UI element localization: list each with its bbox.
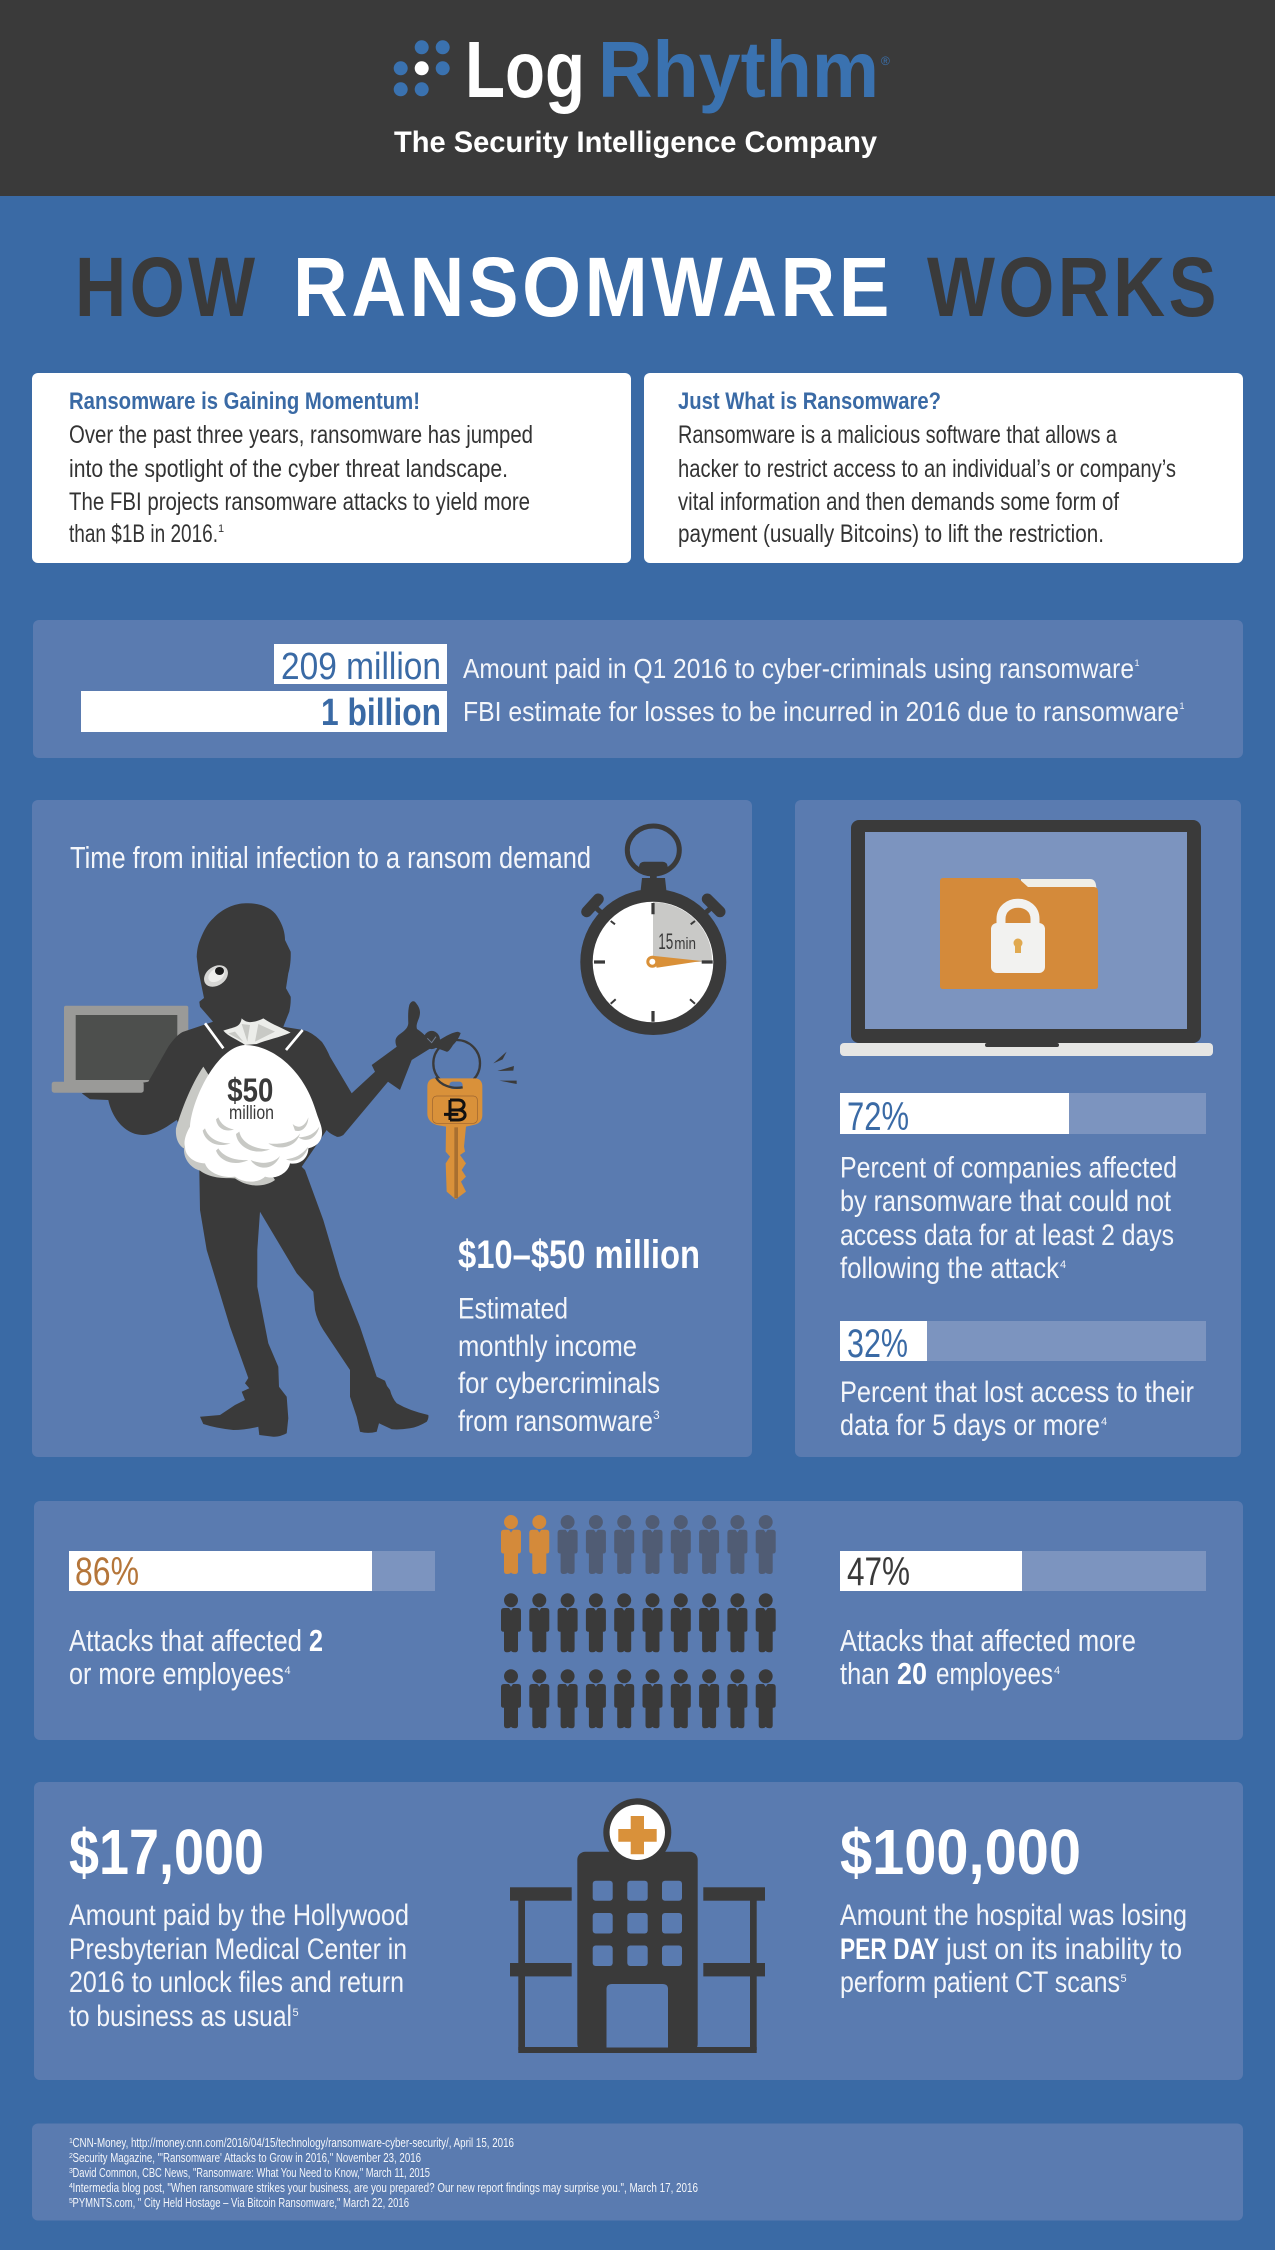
bag label: $50 <box>227 1072 273 1109</box>
stat: $100,000: $100,000 <box>840 1816 1081 1888</box>
text: 32% caption <box>840 1376 1194 1442</box>
illustration: masked thief with laptop and money bag <box>52 903 461 1437</box>
bar: 47% <box>840 1550 1206 1594</box>
text: 72% caption: Percent of companies affected <box>840 1152 1177 1184</box>
title: WORKS <box>927 240 1220 334</box>
header band with logo <box>0 0 1275 196</box>
logo dots <box>394 40 450 96</box>
footnote 1: 1 <box>69 2138 73 2145</box>
footnote 4: 4 <box>69 2183 73 2190</box>
caption: FBI estimate: FBI estimate for losses to be incurred in 2016 due to ransomware <box>463 696 1179 727</box>
text: 72% caption <box>840 1152 1177 1285</box>
laptop base <box>52 1082 144 1093</box>
text: hospital losses: Amount the hospital was losing <box>840 1899 1187 1932</box>
text: 47% caption: than <box>840 1656 890 1691</box>
bar: 72% <box>840 1093 1206 1139</box>
bag label: million <box>229 1103 274 1124</box>
bar: 32% <box>840 1321 1206 1366</box>
footnote 1: CNN-Money, http://money.cnn.com/2016/04/15/technology/ransomware-cyber-security/, April 15, 2016 <box>72 2136 514 2150</box>
thief silhouette <box>82 903 461 1437</box>
row 1 <box>501 1515 776 1574</box>
logo wordmark: Log <box>465 25 585 114</box>
footnote 3: 3 <box>69 2168 73 2175</box>
body text: The FBI projects ransomware attacks to yield more <box>69 488 530 516</box>
text: 72% caption: 4 <box>1060 1259 1066 1271</box>
panel: ransom amounts <box>33 620 1243 758</box>
money bag <box>176 1018 322 1185</box>
icon: hospital building <box>510 1798 765 2053</box>
text: 47% caption <box>840 1623 1136 1691</box>
text: 86% caption: Attacks that affected <box>69 1623 302 1658</box>
bar: 209 million: 209 million <box>281 646 441 688</box>
logo wordmark: Rhythm <box>598 25 879 114</box>
panel: what is ransomware <box>644 373 1243 563</box>
text: 47% caption: Attacks that affected more <box>840 1623 1136 1658</box>
text: Hollywood Presbyterian: to business as usual <box>69 2000 292 2033</box>
bar: 86% <box>69 1550 435 1594</box>
row 2 <box>501 1593 776 1652</box>
stat: monthly income: $10–$50 million <box>458 1233 700 1277</box>
stat: $17,000: $17,000 <box>69 1816 264 1888</box>
body text <box>69 421 533 548</box>
text: 47% caption: employees <box>936 1656 1053 1691</box>
text: hospital losses: just on its inability to <box>945 1933 1182 1966</box>
footnote 4: Intermedia blog post, "When ransomware strikes your business, are you prepared? Our new report findings may surprise you.", March 17, 2016 <box>72 2181 698 2195</box>
bar: 1 billion: 1 billion <box>321 692 441 734</box>
bar: 47%: 47% <box>847 1550 910 1594</box>
icon: laptop with locked folder <box>840 820 1213 1056</box>
text: 86% caption: or more employees <box>69 1656 284 1691</box>
text: 32% caption: data for 5 days or more <box>840 1409 1100 1442</box>
heading: Ransomware is Gaining Momentum! <box>69 388 420 415</box>
panel: hospital costs <box>34 1782 1243 2080</box>
footnote 3: David Common, CBC News, "Ransomware: What You Need to Know," March 11, 2015 <box>72 2166 430 2180</box>
body text: Over the past three years, ransomware has jumped <box>69 421 533 449</box>
logo wordmark <box>465 25 890 114</box>
text: 32% caption: 4 <box>1101 1416 1107 1428</box>
text: 47% caption: 4 <box>1054 1665 1060 1677</box>
text: 86% caption: 4 <box>284 1665 291 1677</box>
footnote 2: Security Magazine, "'Ransomware' Attacks to Grow in 2016," November 23, 2016 <box>72 2151 421 2165</box>
panel: time and income <box>32 800 752 1457</box>
stat: monthly income <box>458 1233 700 1438</box>
stat: monthly income: Estimated <box>458 1292 568 1326</box>
title: HOW <box>75 240 258 334</box>
caption: FBI estimate: 1 <box>1180 701 1185 711</box>
icon: bitcoin key <box>423 1031 517 1199</box>
text: 86% caption <box>69 1623 323 1691</box>
stat: monthly income: monthly income <box>458 1330 637 1363</box>
body text: payment (usually Bitcoins) to lift the restriction. <box>678 520 1104 548</box>
icon: stopwatch: 15 <box>658 929 673 954</box>
tagline: The Security Intelligence Company <box>394 126 877 159</box>
text: Hollywood Presbyterian: 2016 to unlock files and return <box>69 1966 404 1999</box>
heading: Just What is Ransomware? <box>678 388 941 415</box>
bar: 1 billion <box>81 691 447 734</box>
text: 86% caption: 2 <box>309 1623 323 1658</box>
caption: amount paid: 1 <box>1134 658 1140 668</box>
text: Hollywood Presbyterian <box>69 1899 409 2033</box>
icon: stopwatch: min <box>674 934 696 953</box>
row 3 <box>501 1669 776 1728</box>
panel: ransomware is gaining momentum <box>32 373 631 563</box>
bag label <box>227 1072 274 1124</box>
footnote 5: PYMNTS.com, " City Held Hostage – Via Bitcoin Ransomware," March 22, 2016 <box>72 2196 409 2210</box>
heading: time from infection: Time from initial infection to a ransom demand <box>70 840 591 875</box>
body text <box>678 421 1176 548</box>
icon: stopwatch <box>580 826 726 1035</box>
pictogram: people <box>501 1515 776 1728</box>
title: RANSOMWARE <box>293 240 893 334</box>
text: hospital losses: PER DAY <box>840 1933 939 1966</box>
text: 72% caption: by ransomware that could not <box>840 1185 1172 1218</box>
text: hospital losses: perform patient CT scans <box>840 1966 1120 1999</box>
text: hospital losses: 5 <box>1120 1973 1127 1985</box>
caption: amount paid: Amount paid in Q1 2016 to cyber-criminals using ransomware <box>463 653 1134 684</box>
bar: 86%: 86% <box>75 1550 139 1594</box>
laptop screen <box>64 1006 188 1086</box>
footnote 2: 2 <box>69 2153 73 2160</box>
body text: 1 <box>218 523 224 535</box>
body text: Ransomware is a malicious software that allows a <box>678 421 1117 449</box>
bar: 32%: 32% <box>847 1322 908 1366</box>
body text: than $1B in 2016. <box>69 520 218 548</box>
stat: monthly income: for cybercriminals <box>458 1367 660 1400</box>
text: Hollywood Presbyterian: 5 <box>292 2007 299 2019</box>
text: Hollywood Presbyterian: Amount paid by the Hollywood <box>69 1899 409 1932</box>
panel: data access <box>795 800 1241 1457</box>
stat: monthly income: 3 <box>653 1408 660 1422</box>
text: 32% caption: Percent that lost access to their <box>840 1376 1194 1409</box>
text: hospital losses <box>840 1899 1187 1999</box>
bar: 72%: 72% <box>847 1095 909 1139</box>
panel: employees affected <box>34 1501 1243 1740</box>
logo wordmark: ® <box>881 54 890 68</box>
text: 47% caption: 20 <box>897 1656 927 1691</box>
eye <box>200 961 232 991</box>
text: 72% caption: access data for at least 2 days <box>840 1219 1174 1252</box>
text: Hollywood Presbyterian: Presbyterian Medical Center in <box>69 1933 407 1966</box>
body text: vital information and then demands some form of <box>678 488 1119 516</box>
text: 72% caption: following the attack <box>840 1252 1060 1285</box>
stat: monthly income: from ransomware <box>458 1405 653 1438</box>
title <box>75 240 1220 334</box>
panel: footnotes <box>32 2124 1243 2220</box>
footnote 5: 5 <box>69 2198 73 2205</box>
body text: into the spotlight of the cyber threat landscape. <box>69 455 508 483</box>
